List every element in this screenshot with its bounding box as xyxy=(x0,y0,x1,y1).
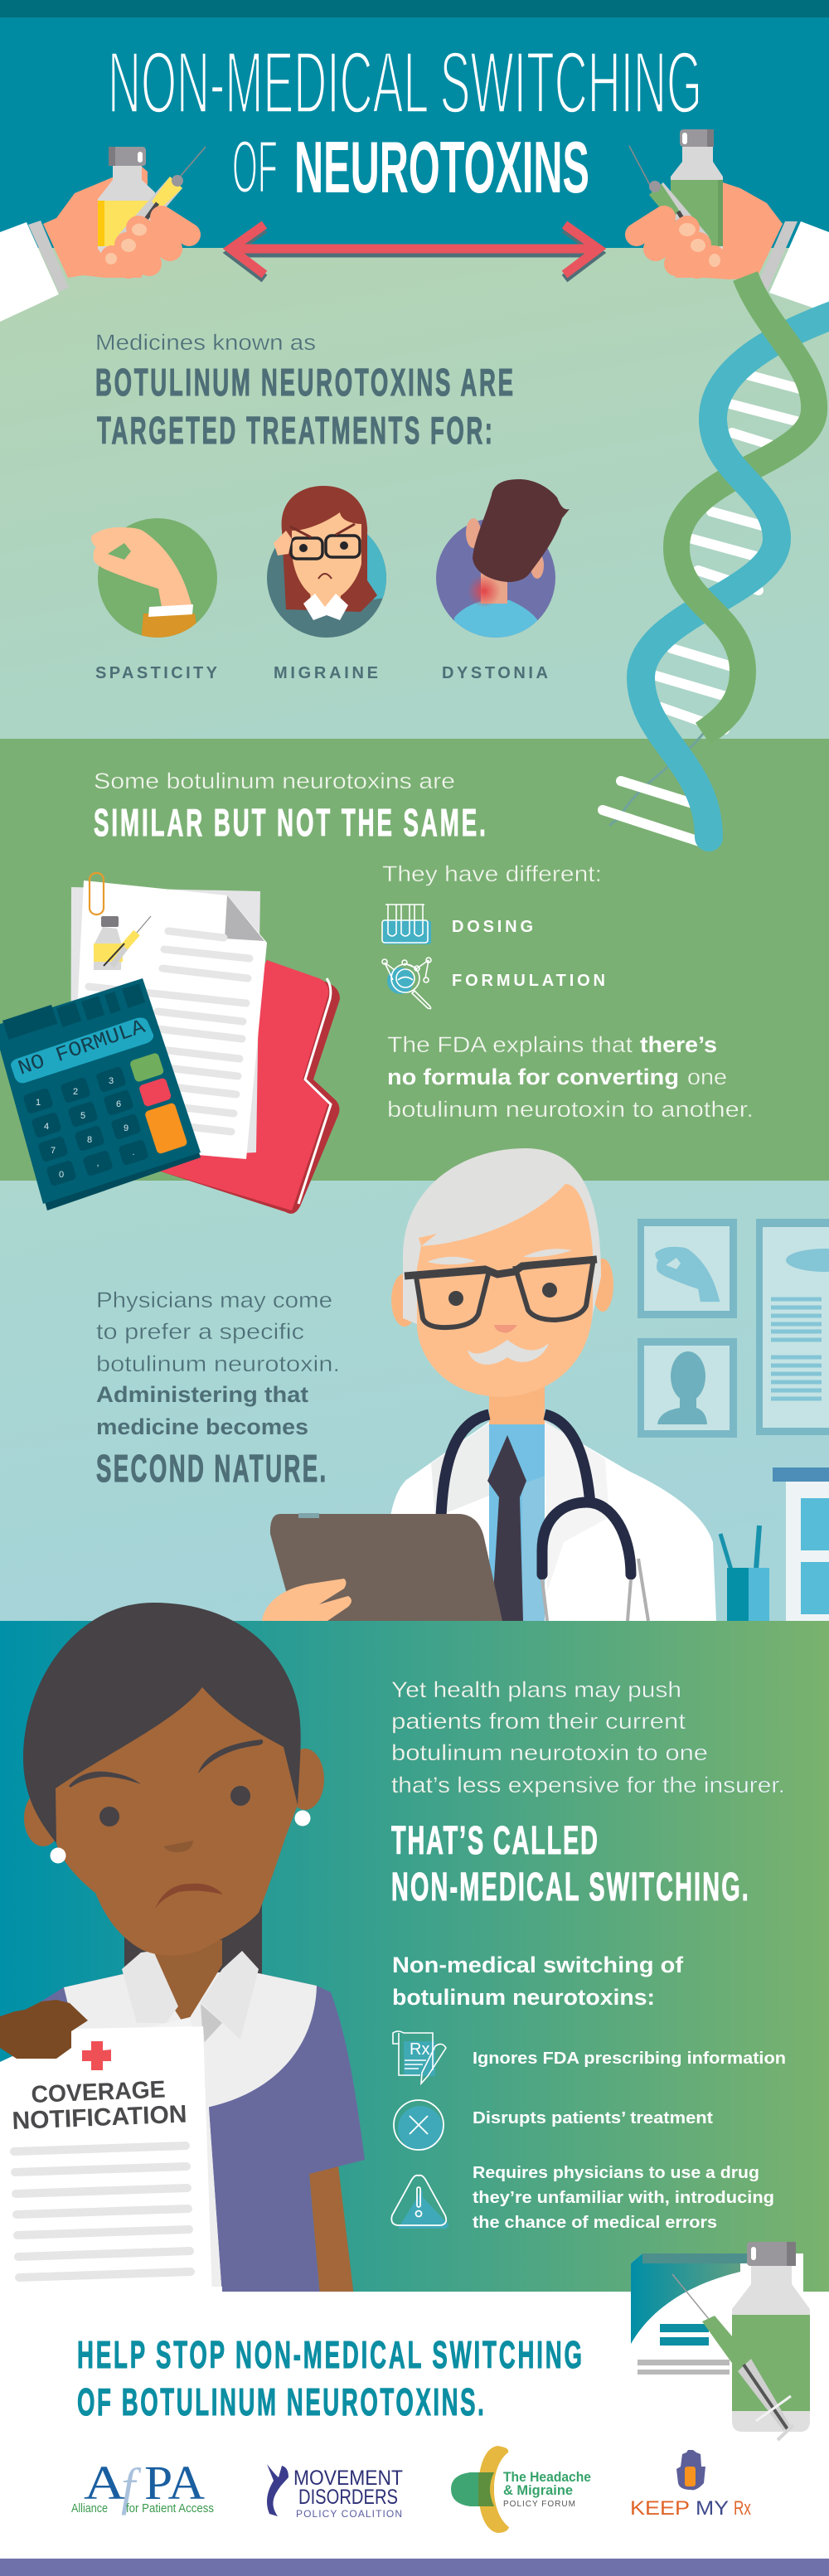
bullet text: Requires physicians to use a drug xyxy=(473,2164,759,2182)
text: FDA explanation: botulinum neurotoxin to another. xyxy=(387,1097,754,1122)
paper pages xyxy=(70,873,267,1161)
logo: Headache and Migraine Policy Forum: & Migraine xyxy=(503,2482,573,2498)
logo: Alliance for Patient Access: f xyxy=(121,2459,142,2515)
label: dystonia: DYSTONIA xyxy=(442,664,548,682)
panel: non-medical switching xyxy=(0,1603,829,2297)
heading: help stop xyxy=(77,2335,582,2424)
paper heading: COVERAGE xyxy=(31,2077,166,2108)
label: formulation: FORMULATION xyxy=(452,972,605,990)
icon: dosing test tubes xyxy=(382,905,431,944)
heading: help stop: OF BOTULINUM NEUROTOXINS. xyxy=(77,2382,484,2424)
text: health plans xyxy=(391,1677,785,1797)
red folder xyxy=(158,960,340,1214)
bullet text: Ignores FDA prescribing information xyxy=(473,2050,786,2068)
text: FDA explanation: The FDA explains that xyxy=(387,1032,633,1057)
icon: right hand with vial and syringe xyxy=(629,129,829,313)
calculator: 1 xyxy=(36,1098,41,1108)
logo: Alliance for Patient Access: for Patient Access xyxy=(126,2501,214,2515)
text: FDA explanation: no formula for converting xyxy=(387,1065,679,1089)
text: physicians: to prefer a specific xyxy=(96,1319,304,1344)
logo: Headache and Migraine Policy Forum: POLICY FORUM xyxy=(503,2500,575,2509)
wall frames xyxy=(638,1219,829,1438)
bullet text xyxy=(473,2164,774,2232)
logo: Keep My Rx: Rx xyxy=(734,2497,751,2520)
text: FDA explanation xyxy=(387,1032,754,1122)
logo: Keep My Rx: KEEP xyxy=(630,2497,690,2520)
calculator: 5 xyxy=(80,1111,85,1121)
heading: second nature: SECOND NATURE. xyxy=(96,1448,326,1491)
text: health plans: botulinum neurotoxin to one xyxy=(391,1740,708,1765)
title: OF xyxy=(232,126,278,209)
calculator: . xyxy=(132,1147,135,1157)
calculator: 4 xyxy=(44,1122,49,1132)
subheading xyxy=(392,1953,684,2010)
icon: spasticity hand xyxy=(91,518,217,643)
bullet text: the chance of medical errors xyxy=(473,2214,717,2232)
logo: Movement Disorders Policy Coalition: DISORDERS xyxy=(298,2486,398,2509)
logo: Alliance for Patient Access: Alliance xyxy=(71,2501,108,2515)
shelf and pen cup xyxy=(720,1467,829,1621)
title: NEUROTOXINS xyxy=(294,126,589,208)
calculator: 9 xyxy=(124,1123,128,1133)
text: FDA explanation: there’s xyxy=(640,1032,717,1057)
logo: Movement Disorders Policy Coalition: POLICY COALITION xyxy=(296,2508,402,2520)
text: different: They have different: xyxy=(382,861,602,886)
heading: that's called xyxy=(391,1819,749,1909)
logo: Alliance for Patient Access: PA xyxy=(144,2456,205,2510)
illustration: documents, folder and calculator xyxy=(0,873,340,1214)
heading: help stop: HELP STOP NON-MEDICAL SWITCHING xyxy=(77,2335,582,2377)
text: physicians: Physicians may come xyxy=(96,1288,332,1312)
calculator: 0 xyxy=(59,1170,64,1180)
bullet text: Disrupts patients’ treatment xyxy=(473,2109,713,2127)
calculator screen text: NO FORMULA xyxy=(15,1015,148,1081)
illustration: coverage notification paper xyxy=(0,2000,222,2297)
logo: Headache and Migraine Policy Forum: The Headache xyxy=(503,2469,591,2485)
calculator: , xyxy=(96,1158,99,1168)
subheading: botulinum neurotoxins: xyxy=(392,1985,655,2010)
heading: similar: SIMILAR BUT NOT THE SAME. xyxy=(94,803,486,845)
heading: targeted treatments xyxy=(95,362,513,453)
bullet text: they’re unfamiliar with, introducing xyxy=(473,2189,774,2207)
intro text: Medicines known as xyxy=(95,330,316,355)
text: physicians: botulinum neurotoxin. xyxy=(96,1351,340,1376)
illustration: doctor xyxy=(262,1148,716,1621)
text: health plans: Yet health plans may push xyxy=(391,1677,681,1702)
heading: that's called: NON-MEDICAL SWITCHING. xyxy=(391,1865,749,1909)
icon: formulation magnifier xyxy=(382,958,431,1009)
text: FDA explanation: one xyxy=(687,1065,727,1089)
logo: Alliance for Patient Access xyxy=(71,2456,214,2515)
logo: Alliance for Patient Access: A xyxy=(84,2456,125,2510)
icon: prescription: Rx xyxy=(410,2040,429,2059)
title xyxy=(108,34,702,209)
heading: that's called: THAT’S CALLED xyxy=(391,1819,598,1863)
heading: targeted treatments: BOTULINUM NEUROTOXINS ARE xyxy=(95,362,513,405)
logo: Movement Disorders Policy Coalition: MOVEMENT xyxy=(293,2467,403,2490)
footer bar xyxy=(0,2559,829,2576)
panel: physicians xyxy=(0,1148,829,1621)
subheading: Non-medical switching of xyxy=(392,1953,684,1977)
text: health plans: patients from their current xyxy=(391,1709,686,1734)
intro text: Some botulinum neurotoxins are xyxy=(94,769,455,793)
panel: similar but not the same xyxy=(0,739,829,1181)
arrow: double-headed xyxy=(230,225,599,279)
icon: warning triangle xyxy=(391,2176,448,2229)
icon: migraine woman xyxy=(267,486,390,638)
label: migraine: MIGRAINE xyxy=(274,664,378,682)
icon: left hand with vial and syringe xyxy=(0,147,206,322)
calculator: 3 xyxy=(109,1076,114,1086)
text: physicians xyxy=(96,1288,340,1439)
calculator: 8 xyxy=(87,1135,92,1145)
panel: treatments xyxy=(0,248,829,739)
calculator: 7 xyxy=(51,1146,56,1156)
calculator: 2 xyxy=(73,1087,78,1097)
logo: Keep My Rx: MY xyxy=(696,2497,729,2520)
illustration: medicine box, bottle and syringe xyxy=(631,2242,810,2440)
illustration: DNA helix xyxy=(603,276,829,843)
paper heading xyxy=(12,2077,187,2135)
logo: Movement Disorders Policy Coalition xyxy=(267,2464,403,2520)
logo: Headache and Migraine Policy Forum xyxy=(451,2446,591,2533)
label: spasticity: SPASTICITY xyxy=(95,664,218,682)
text: physicians: Administering that xyxy=(96,1382,308,1407)
text: health plans: that’s less expensive for the insurer. xyxy=(391,1773,785,1797)
logo: Keep My Rx xyxy=(630,2450,751,2520)
label: dosing: DOSING xyxy=(452,918,533,936)
calculator: 6 xyxy=(116,1099,121,1109)
calculator xyxy=(0,978,201,1210)
text: physicians: medicine becomes xyxy=(96,1414,308,1439)
calculator keys xyxy=(22,1066,149,1186)
icon: prescription xyxy=(393,2031,446,2084)
panel: header xyxy=(0,0,829,249)
panel: call to action xyxy=(0,2287,829,2559)
icon: dystonia person xyxy=(436,479,570,638)
illustration: woman patient xyxy=(23,1603,365,2297)
heading: targeted treatments: TARGETED TREATMENTS FOR: xyxy=(97,410,492,453)
icon: x in circle xyxy=(394,2100,444,2151)
paper heading: NOTIFICATION xyxy=(12,2101,187,2135)
